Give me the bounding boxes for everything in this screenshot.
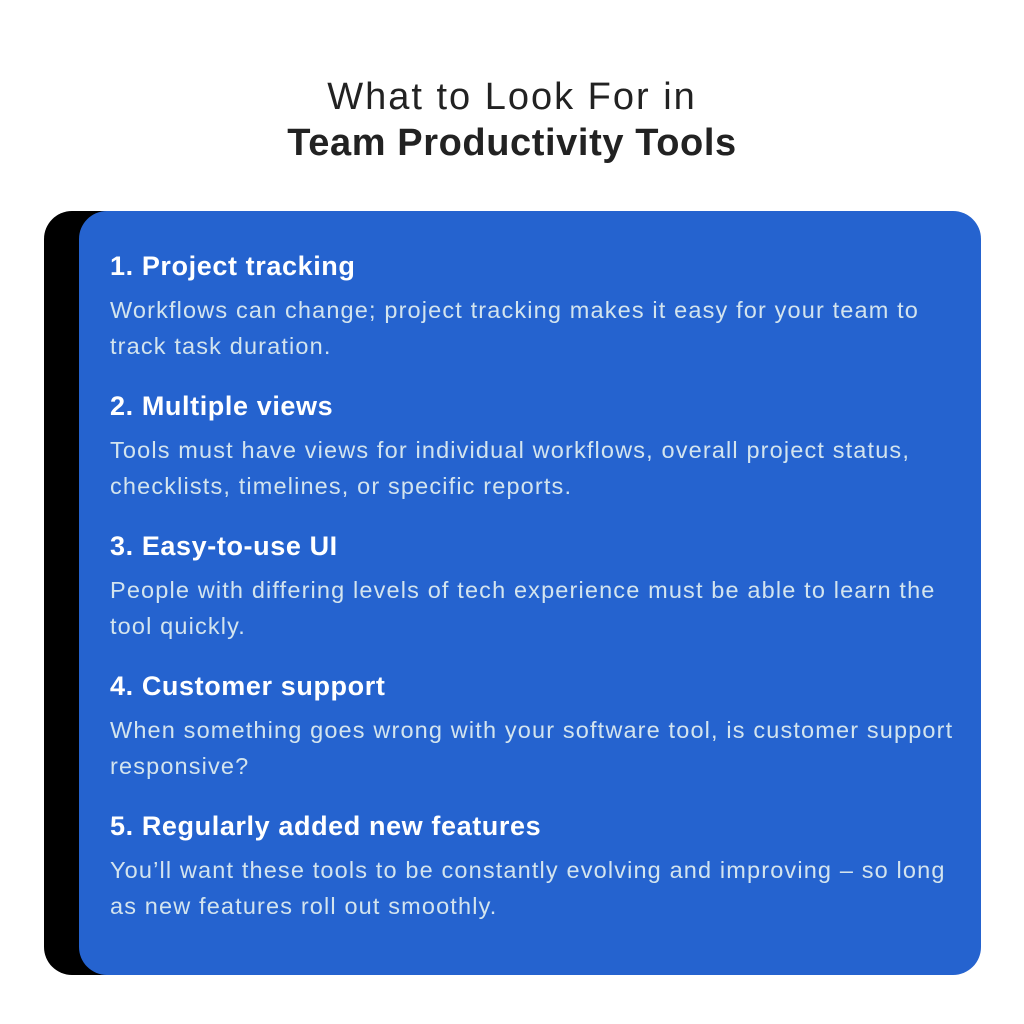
item 5: 5. Regularly added new features [110,811,541,841]
item 3: People with differing levels of tech experience must be able to learn the [110,577,936,603]
item 2: checklists, timelines, or specific reports. [110,473,572,499]
black backing card [44,211,344,975]
item 2: 2. Multiple views [110,391,333,421]
item 5 [110,811,946,919]
item 3 [110,531,936,639]
item 3: tool quickly. [110,613,246,639]
item 4: When something goes wrong with your software tool, is customer support [110,717,953,743]
title [287,76,737,164]
item 1 [110,251,919,359]
item 1: Workflows can change; project tracking makes it easy for your team to [110,297,919,323]
item 5: as new features roll out smoothly. [110,893,497,919]
item 5: You’ll want these tools to be constantly evolving and improving – so long [110,857,946,883]
title: What to Look For in [327,76,697,118]
item 1: 1. Project tracking [110,251,356,281]
item 4: 4. Customer support [110,671,385,701]
item 2 [110,391,910,499]
panel: list card [79,211,981,975]
item 2: Tools must have views for individual workflows, overall project status, [110,437,910,463]
item 4 [110,671,953,779]
title: Team Productivity Tools [287,122,737,164]
item 4: responsive? [110,753,249,779]
item 1: track task duration. [110,333,332,359]
item 3: 3. Easy-to-use UI [110,531,338,561]
